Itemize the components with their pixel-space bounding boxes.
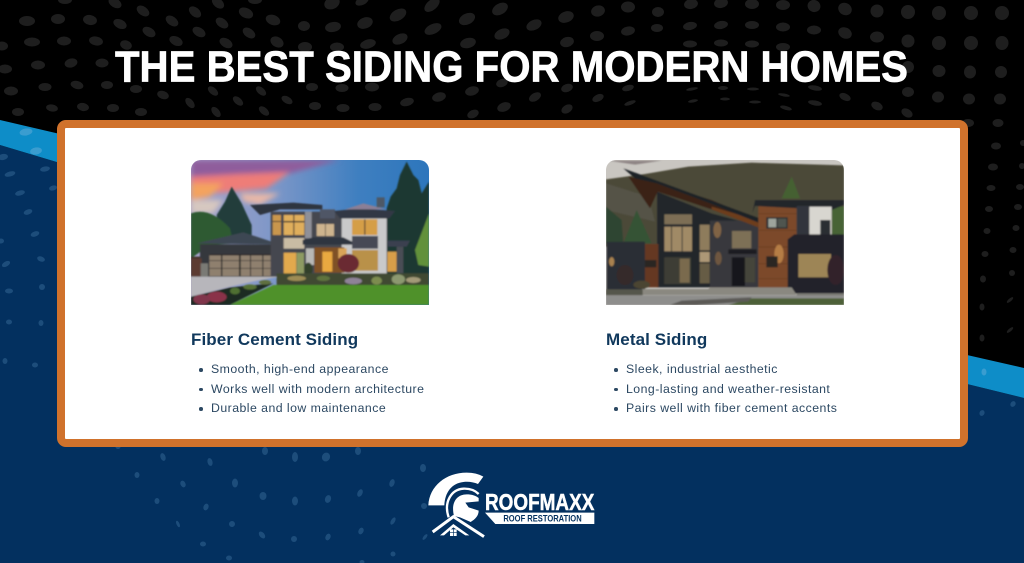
heading: fiber cement siding: Fiber Cement Siding xyxy=(191,330,358,349)
title: THE BEST SIDING FOR MODERN HOMES xyxy=(115,42,908,92)
list: metal siding benefits: Sleek, industrial aesthetic xyxy=(626,362,778,376)
tagline: ROOF RESTORATION xyxy=(503,514,582,524)
left block xyxy=(607,242,645,290)
list: fiber cement benefits: Smooth, high-end appearance xyxy=(211,362,389,376)
trees xyxy=(387,162,429,283)
windows xyxy=(273,215,281,235)
main dark block xyxy=(657,192,758,287)
upper right xyxy=(752,200,844,213)
steps and ground xyxy=(642,287,797,295)
right dark block xyxy=(788,234,844,293)
list: fiber cement benefits: Durable and low maintenance xyxy=(211,401,386,415)
icon: spartan helmet with roof xyxy=(428,473,484,537)
porch xyxy=(303,237,352,245)
driveway and lawn xyxy=(191,277,280,297)
photo: fiber cement siding home xyxy=(191,160,429,305)
shrubs xyxy=(338,254,359,273)
heading: metal siding: Metal Siding xyxy=(606,330,707,349)
photo: metal siding home xyxy=(606,160,844,305)
tagline bar xyxy=(485,513,594,524)
list: fiber cement benefits: Works well with modern architecture xyxy=(211,382,424,396)
list: metal siding benefits xyxy=(614,362,837,415)
roof xyxy=(628,177,758,227)
list: fiber cement benefits xyxy=(199,362,424,415)
windows xyxy=(664,214,692,224)
list: metal siding benefits: Pairs well with fiber cement accents xyxy=(626,401,837,415)
wood section xyxy=(758,205,798,288)
garage wing xyxy=(197,232,280,244)
main house xyxy=(271,212,387,277)
panel: siding options xyxy=(57,120,968,447)
logo: Roofmaxx roof restoration xyxy=(428,472,595,538)
list: metal siding benefits: Long-lasting and weather-resistant xyxy=(626,382,830,396)
